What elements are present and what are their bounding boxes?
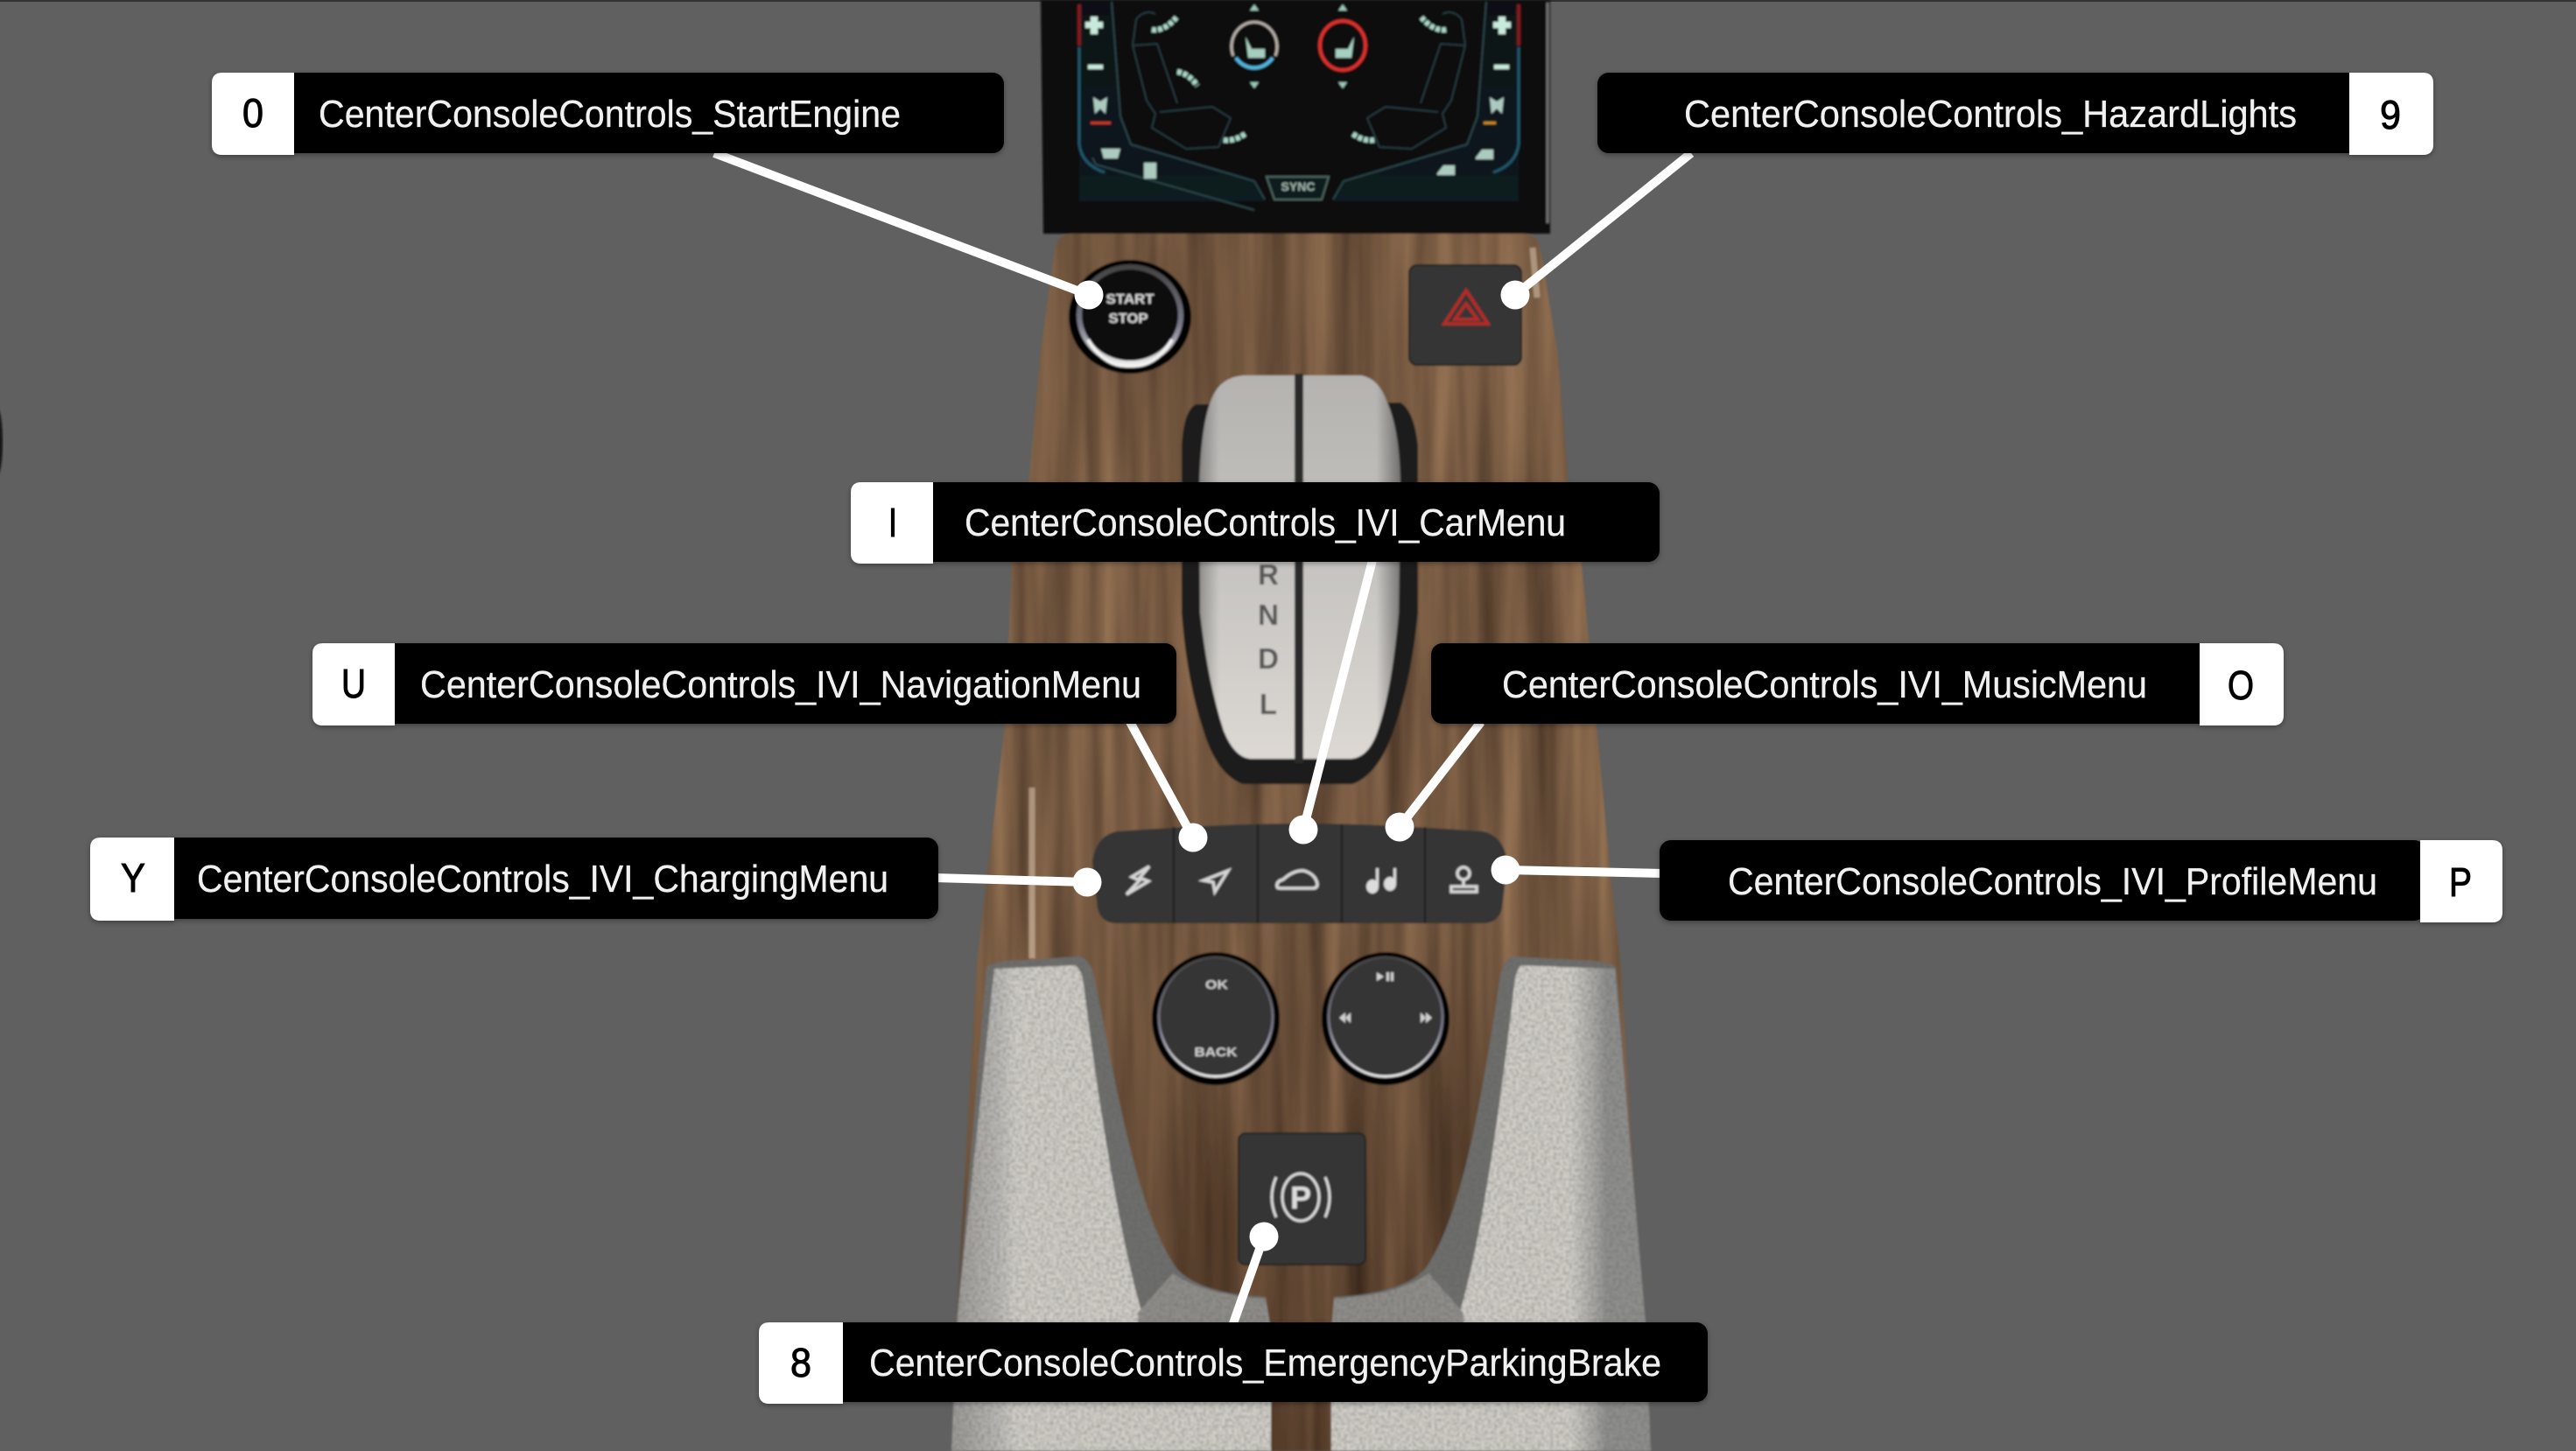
leader: hazard lights: [1500, 153, 1691, 310]
knob labels: OK: [1205, 978, 1228, 992]
IVI menu button panel: [1092, 824, 1507, 923]
knob edge shading: [1199, 375, 1400, 759]
label: music menu: CenterConsoleControls_IVI_MusicMenu: [1502, 663, 2147, 706]
label: start engine: [212, 73, 1004, 155]
bolster bevel: [1331, 957, 1651, 1451]
bevel lower patch: [1331, 1273, 1463, 1330]
PRNDL letters: [1258, 558, 1279, 720]
label: parking brake: CenterConsoleControls_EmergencyParkingBrake: [869, 1342, 1661, 1384]
icon: parking brake P: [1272, 1174, 1330, 1221]
walnut wood console panel: [945, 228, 1659, 1451]
bolster light leather: [951, 965, 1271, 1451]
wood highlight streaks: [1032, 248, 1537, 958]
PRNDL letters: R: [1258, 558, 1279, 591]
label: music menu: [1431, 643, 2284, 726]
chrome highlight: [1088, 340, 1172, 366]
knob housing: [1152, 952, 1280, 1085]
seat heating ring left: [1232, 4, 1277, 88]
PRNDL letters: N: [1258, 599, 1279, 631]
label: hazard lights: [1597, 73, 2433, 155]
icon: car: [1277, 871, 1317, 888]
PRNDL letters: L: [1260, 688, 1277, 720]
leader lines and anchor dots: [714, 153, 1691, 1326]
media rotary knob: [1322, 952, 1449, 1085]
bolster leather grain: [1329, 954, 1653, 1451]
leader: car menu: [1288, 560, 1372, 844]
label: navigation menu: U: [341, 661, 366, 706]
sync button: [1267, 177, 1329, 200]
seat heating ring right: [1320, 4, 1365, 88]
button housing: [1069, 260, 1191, 374]
button label: START: [1106, 292, 1155, 307]
bolster bevel: [951, 957, 1271, 1451]
sync button: SYNC: [1281, 179, 1315, 193]
bevel lower patch: [1138, 1273, 1271, 1330]
display bezel panels: [1079, 2, 1519, 210]
OK BACK rotary knob: BACK: [1194, 1045, 1238, 1060]
icon: parking brake P: P: [1290, 1180, 1311, 1216]
screen right edge highlight: [1546, 3, 1549, 223]
media icons: [1339, 972, 1432, 1023]
button body: [1409, 265, 1521, 365]
seat outline left: [1133, 12, 1231, 149]
panel separators: [1174, 824, 1425, 923]
hazard triangle icon: [1444, 291, 1488, 324]
label: start engine: CenterConsoleControls_StartEngine: [319, 93, 901, 136]
label: charging menu: [90, 838, 938, 921]
start stop button: STOP: [1108, 312, 1148, 326]
label: charging menu: CenterConsoleControls_IVI_ChargingMenu: [197, 858, 888, 901]
touch screen: seat controls: [1079, 2, 1519, 210]
wood horizontal shading: [1020, 231, 1449, 1084]
left edge cut-off dark shape: [0, 409, 3, 475]
bolster leather grain: [950, 954, 1274, 1451]
chrome ring: [1079, 267, 1181, 363]
shifter surround: [1182, 403, 1418, 784]
label: parking brake: [759, 1322, 1708, 1404]
label: profile menu: [1660, 840, 2502, 922]
wood grain: [945, 228, 1659, 1451]
seat adjustment arrows: [1152, 18, 1446, 140]
temperature controls right: [1437, 17, 1511, 175]
leader: start engine: [714, 153, 1103, 310]
label: charging menu: Y: [121, 855, 145, 901]
leader: charging menu: [935, 868, 1101, 896]
icon: profile person: [1451, 867, 1477, 892]
label: car menu: I: [888, 500, 897, 545]
left leather seat bolster: [950, 954, 1274, 1451]
button body: [1239, 1133, 1365, 1265]
OK BACK rotary knob: [1152, 952, 1280, 1085]
knob center seam: [1295, 374, 1303, 763]
label: hazard lights: 9: [2380, 92, 2401, 137]
start stop button: [1069, 260, 1191, 374]
leader: profile menu: [1492, 856, 1663, 884]
gear shifter: [1182, 374, 1418, 784]
label: hazard lights: CenterConsoleControls_HazardLights: [1684, 93, 2297, 136]
icon: navigation arrow: [1204, 871, 1228, 892]
label: car menu: [851, 482, 1660, 564]
seat outline right: [1367, 12, 1465, 149]
panel body: [1092, 824, 1507, 923]
wood vertical shading: [945, 228, 1659, 1451]
label: navigation menu: CenterConsoleControls_IVI_NavigationMenu: [420, 663, 1141, 706]
knob face: [1159, 957, 1273, 1076]
temperature controls left: [1085, 17, 1156, 179]
label: navigation menu: [312, 643, 1176, 726]
screen housing: [1041, 0, 1550, 234]
bolster light leather: [1331, 965, 1651, 1451]
leader: navigation menu: [1130, 722, 1208, 852]
top edge strip: [0, 0, 2576, 2]
leader: music menu: [1385, 722, 1481, 842]
icon: music notes: [1366, 868, 1396, 894]
icon: charging bolt: [1127, 866, 1149, 894]
hazard lights button: [1409, 265, 1521, 365]
leader: parking brake: [1232, 1222, 1278, 1326]
center console illustration: [945, 0, 1659, 1451]
right leather seat bolster: [1329, 954, 1653, 1451]
label: profile menu: CenterConsoleControls_IVI_ProfileMenu: [1728, 860, 2377, 903]
display background: [1079, 2, 1519, 201]
label: music menu: O: [2228, 662, 2254, 708]
knob housing: [1322, 952, 1449, 1085]
PRNDL letters: D: [1258, 642, 1279, 675]
label: start engine: 0: [242, 90, 263, 136]
knob face: [1329, 957, 1442, 1076]
label: profile menu: P: [2449, 859, 2472, 905]
parking brake button: [1239, 1133, 1365, 1265]
label: parking brake: 8: [790, 1340, 811, 1385]
label: car menu: CenterConsoleControls_IVI_CarMenu: [965, 501, 1566, 544]
shifter knob: [1199, 375, 1400, 759]
